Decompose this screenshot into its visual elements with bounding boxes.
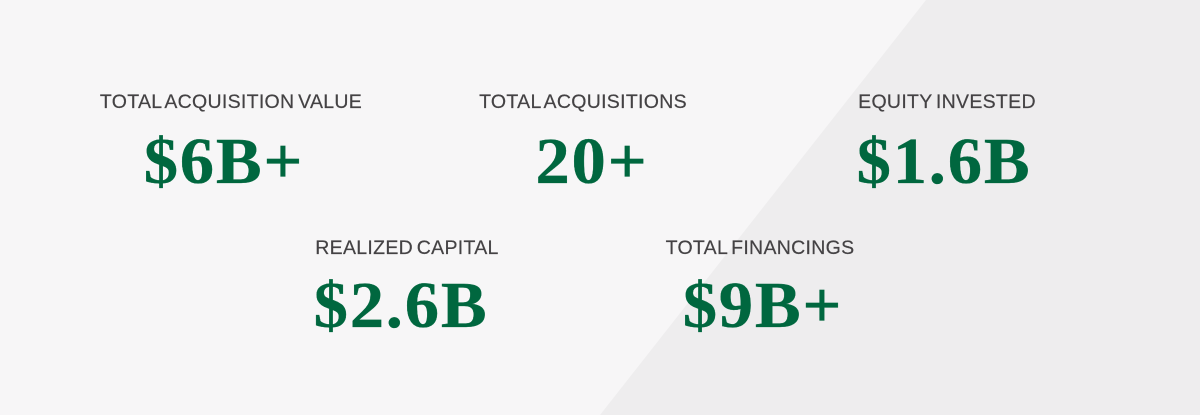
- stat: realized capital: REALIZED CAPITAL: [315, 237, 499, 259]
- value: total financings: $9B+: [683, 269, 843, 342]
- stat: total financings: TOTAL FINANCINGS: [666, 237, 854, 259]
- stat: equity invested: EQUITY INVESTED: [858, 91, 1036, 113]
- stat: total acquisition value: TOTAL ACQUISITION VALUE: [100, 91, 362, 113]
- value: total acquisition value: $6B+: [144, 125, 304, 198]
- value: equity invested: $1.6B: [857, 125, 1031, 198]
- value: total acquisitions: 20+: [535, 125, 649, 198]
- value: realized capital: $2.6B: [314, 269, 488, 342]
- stat: total acquisitions: TOTAL ACQUISITIONS: [479, 91, 687, 113]
